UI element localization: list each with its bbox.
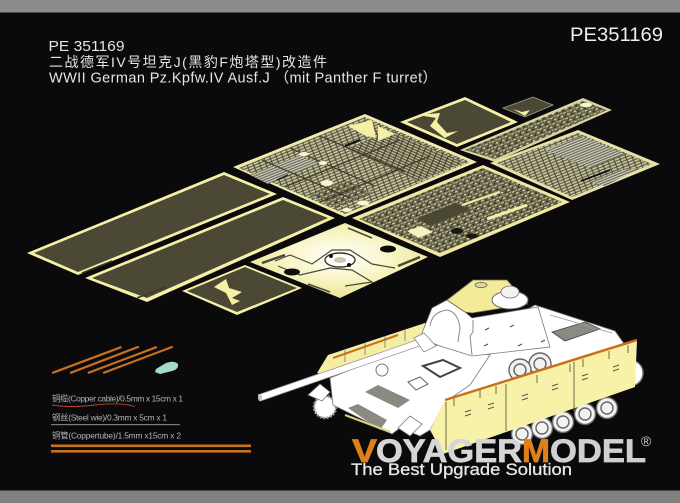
far side skirt [317,323,436,376]
rear hull deck [445,305,625,402]
sheet: small upper right mesh [503,97,553,117]
tank illustration [258,280,643,454]
turret roof [447,280,528,313]
sheet: large mesh 1 [27,172,277,275]
sheet: upper centre fret [233,114,477,217]
sheet: lower centre fret [352,165,570,257]
sheet: large mesh 2 [85,197,335,302]
label: copper cable: 铜缆(Copper cable)/0.5mm x 15cm x 1 [52,394,183,404]
wordmark: ODEL [550,433,646,469]
label: copper tube: 铜管(Coppertube)/1.5mm x15cm x 2 [52,430,181,440]
wordmark: OYAGER [376,433,522,469]
photo-etched sheets [27,97,660,315]
registered mark: ® [641,433,652,449]
title block [48,39,437,86]
wordmark: M [522,433,550,469]
wordmark: V [352,433,378,469]
sample: copper cable [52,404,135,406]
label: steel wire: 钢丝(Steel wie)/0.3mm x 5cm x 1 [52,413,167,423]
sheet: yellow plate [250,223,428,298]
sheet: right fret [490,130,660,200]
english title: WWII German Pz.Kpfw.IV Ausf.J （mit Panther F turret） [49,70,437,86]
sprocket wheel [314,396,336,418]
sample: copper tubes [51,444,251,453]
tagline: The Best Upgrade Solution [351,460,572,479]
sheet: small mesh [182,265,302,315]
hull [308,342,490,436]
gun barrel [258,333,436,401]
product code: PE 351169 [48,39,124,55]
near side skirt [430,340,637,454]
road wheels [509,353,618,444]
sample: steel wire [51,424,180,425]
icon: copper rods [53,347,172,373]
icon: glue bottle [155,362,178,374]
sheet: narrow parts fret [460,98,612,162]
product code top right: PE351169 [570,24,663,46]
wordmark [352,433,646,469]
turret [420,300,550,356]
chinese title: 二战德军IV号坦克J(黑豹F炮塔型)改造件 [49,54,327,70]
brand logo [351,433,652,479]
sheet: upper right mesh [400,97,518,147]
rear wheel [617,360,643,386]
materials: copper rods and wire [51,347,251,453]
